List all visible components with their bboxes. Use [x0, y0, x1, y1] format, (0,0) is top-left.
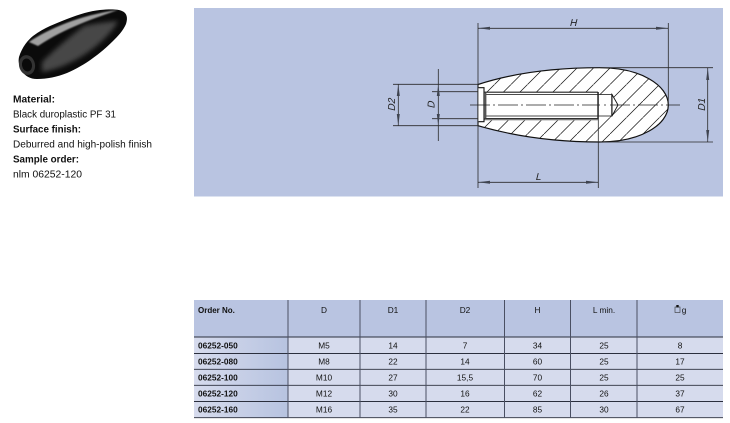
table body rows: M5 — [318, 340, 330, 350]
table body rows — [194, 300, 723, 418]
table header row — [194, 300, 723, 337]
product photo: black knob — [17, 9, 127, 79]
text block: material and finish details: Deburred and high-polish finish — [13, 140, 152, 150]
table header row: D1 — [388, 305, 399, 315]
text block: material and finish details: Black duroplastic PF 31 — [13, 110, 116, 120]
dimension D — [427, 69, 478, 141]
table body rows: 06252-080 — [198, 356, 238, 366]
table body rows: 30 — [599, 404, 609, 414]
table body rows: 85 — [533, 404, 542, 414]
dimension H: H — [569, 18, 579, 29]
table header row: L min. — [593, 305, 615, 315]
table header row: D — [321, 305, 327, 315]
table body rows: 7 — [463, 340, 468, 350]
icon: weight — [675, 305, 680, 312]
table body rows: 8 — [678, 340, 683, 350]
text block: material and finish details: Surface finish: — [13, 124, 81, 136]
table body rows: 14 — [460, 356, 470, 366]
text block: material and finish details: nlm 06252-120 — [13, 170, 82, 180]
table body rows: 25 — [599, 340, 609, 350]
table body rows: 06252-100 — [198, 372, 238, 382]
text block: material and finish details: Material: — [13, 94, 55, 106]
table body rows: 06252-160 — [198, 404, 238, 414]
dimension L: L — [534, 172, 543, 183]
dimension D: D — [427, 99, 437, 109]
table body rows: 34 — [533, 340, 542, 350]
table body rows: 22 — [388, 356, 398, 366]
dimension L — [478, 92, 598, 188]
table body rows: 25 — [675, 372, 685, 382]
table body rows: 67 — [675, 404, 685, 414]
table: order numbers and dimensions — [194, 300, 723, 418]
dimension D2 — [387, 84, 478, 126]
table body rows: M16 — [316, 404, 332, 414]
table body rows: M8 — [318, 356, 330, 366]
dimension D1: D1 — [697, 96, 708, 112]
table body rows: 70 — [533, 372, 542, 382]
panel: technical drawing — [194, 8, 723, 196]
table body rows: 26 — [599, 388, 609, 398]
table body rows: 62 — [533, 388, 542, 398]
table header row: g — [682, 305, 687, 315]
table body rows: 35 — [388, 404, 398, 414]
table body rows: 06252-120 — [198, 388, 238, 398]
dimension H — [478, 18, 668, 188]
text block: material and finish details: Sample order: — [13, 154, 79, 166]
table header row: D2 — [460, 305, 471, 315]
dimension D2: D2 — [387, 96, 398, 112]
table body rows: M10 — [316, 372, 332, 382]
knob cross-section — [470, 68, 680, 142]
table body rows: 30 — [388, 388, 398, 398]
table header row: H — [534, 305, 540, 315]
table body rows: 16 — [460, 388, 470, 398]
table body rows: 17 — [675, 356, 685, 366]
table body rows: M12 — [316, 388, 332, 398]
table body rows: 60 — [533, 356, 542, 366]
table body rows: 27 — [388, 372, 398, 382]
table body rows: 06252-050 — [198, 340, 238, 350]
table body rows: 14 — [388, 340, 398, 350]
text block: material and finish details — [13, 94, 152, 180]
table body rows: 22 — [460, 404, 470, 414]
dimension D1 — [600, 68, 713, 142]
table header row: Order No. — [198, 306, 235, 315]
table body rows: 15,5 — [457, 372, 473, 382]
table body rows: 25 — [599, 356, 609, 366]
table body rows: 25 — [599, 372, 609, 382]
table body rows: 37 — [675, 388, 685, 398]
